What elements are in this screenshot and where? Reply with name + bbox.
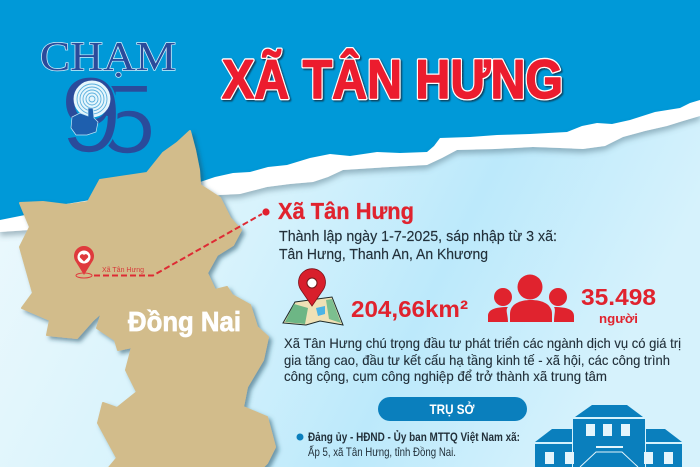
heading pill: Trụ sở: TRỤ SỞ [430, 400, 475, 417]
population value [581, 284, 656, 326]
icon: headquarters building [535, 405, 682, 467]
logo number 95: 9 [60, 54, 122, 175]
icon: fingerprint [74, 81, 110, 117]
icon: people [488, 274, 574, 322]
founding text [279, 229, 557, 263]
location label: Xã Tân Hưng [102, 265, 144, 274]
commune name: Xã Tân Hưng [278, 198, 414, 224]
population value: 35.498 [581, 284, 656, 310]
logo number 95: 5 [100, 64, 156, 174]
dashed connector [94, 214, 262, 276]
headquarters address: Ấp 5, xã Tân Hưng, tỉnh Đồng Nai. [308, 444, 456, 459]
title: XÃ TÂN HƯNG [222, 48, 563, 110]
province name: Đồng Nai [128, 306, 241, 337]
logo wordmark: CHẠM [40, 33, 176, 79]
logo: Chạm 95 [40, 33, 176, 175]
description text: Xã Tân Hưng chú trọng đầu tư phát triển các ngành dịch vụ có giá trị [284, 335, 681, 351]
headquarters address [296, 429, 520, 459]
torn paper wave [0, 100, 700, 232]
description text [284, 335, 681, 384]
title: XÃ TÂN HƯNG [222, 48, 563, 110]
headquarters address: Đảng ủy - HĐND - Ủy ban MTTQ Việt Nam xã: [308, 429, 520, 444]
icon: folded map with pin [283, 269, 343, 325]
connector dot [262, 208, 270, 216]
description text: công cộng, cụm công nghiệp để trở thành xã trung tâm [284, 368, 607, 384]
heading pill: Trụ sở [378, 397, 527, 421]
founding text: Tân Hưng, Thanh An, An Khương [279, 247, 488, 263]
province shape [20, 131, 275, 467]
population value: người [599, 311, 638, 326]
area value: 204,66km² [351, 296, 468, 322]
icon: location pin [74, 246, 94, 278]
founding text: Thành lập ngày 1-7-2025, sáp nhập từ 3 xã: [279, 229, 557, 245]
icon: pointing hand [71, 108, 98, 135]
background: light sea area [0, 115, 700, 467]
map: Đồng Nai province [20, 131, 275, 467]
panel: commune info [278, 198, 557, 263]
logo number 95 [60, 54, 156, 175]
description text: gia tăng cao, đầu tư kết cấu hạ tầng kinh tế - xã hội, các công trình [284, 352, 670, 368]
